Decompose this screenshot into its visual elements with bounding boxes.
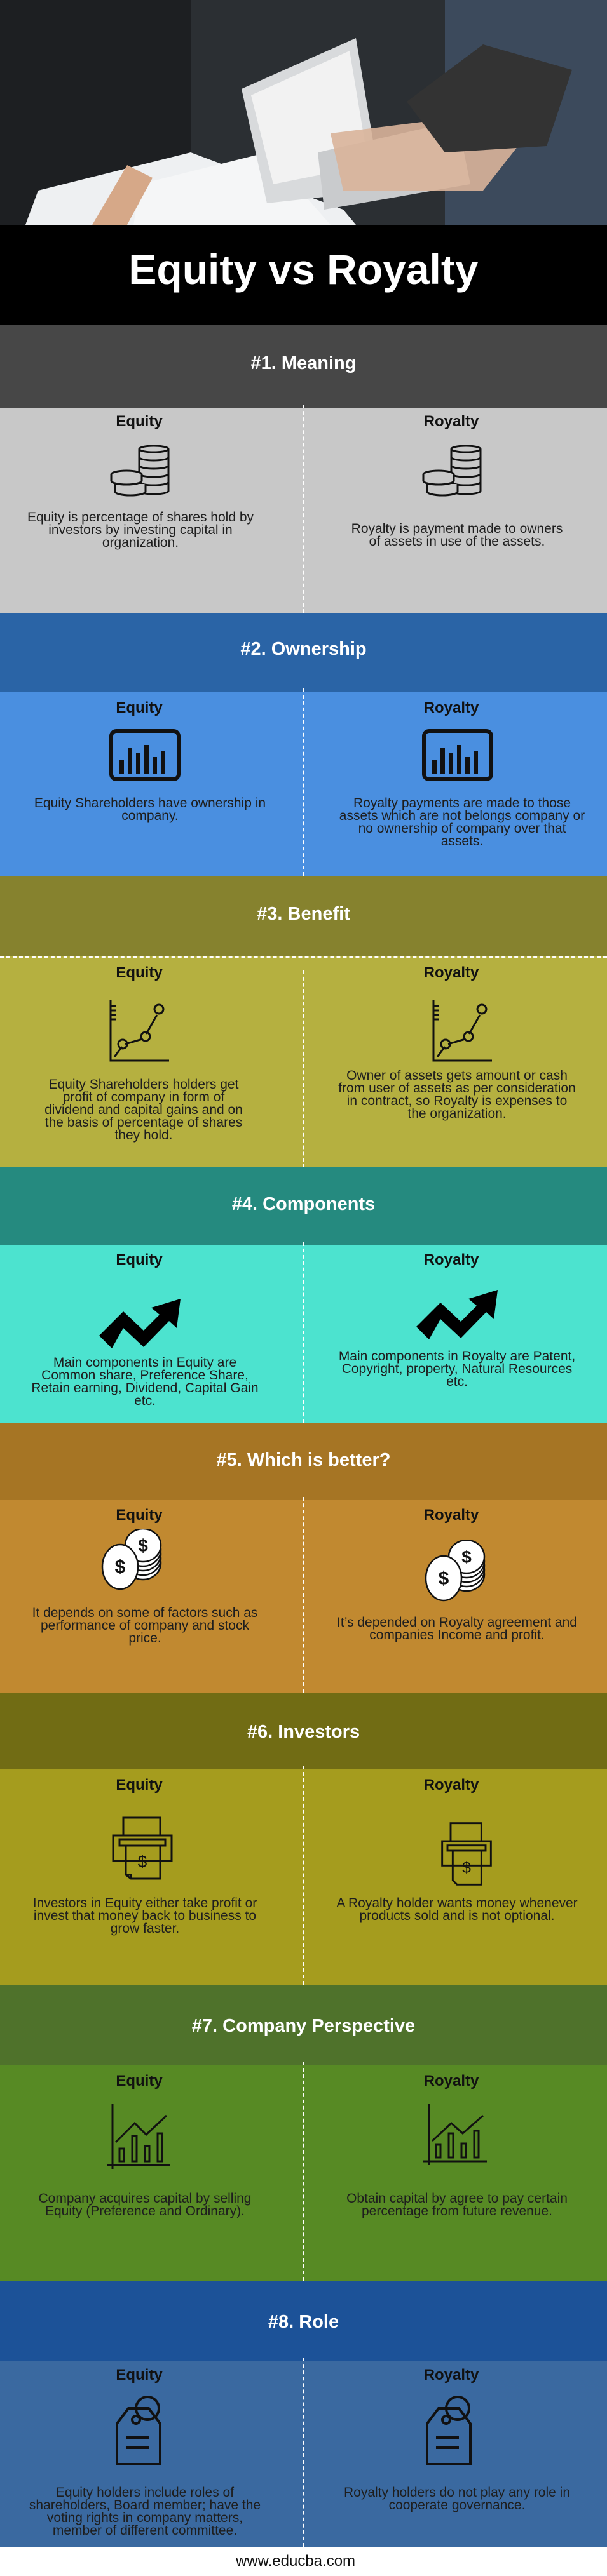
label royalty: Royalty — [424, 2072, 479, 2090]
label royalty: Royalty — [424, 1506, 479, 1524]
icon: printer equity: $ — [138, 1852, 147, 1871]
text royalty — [351, 521, 563, 549]
icon: dollar coins royalty: $ — [461, 1547, 472, 1567]
section 5 body — [0, 1500, 607, 1693]
text equity: Company acquires capital by selling — [38, 2191, 252, 2206]
label equity: Equity — [116, 964, 163, 981]
text royalty: Royalty holders do not play any role in — [344, 2485, 570, 2500]
section 7 header — [0, 1985, 607, 2065]
title — [0, 225, 607, 325]
section 2 body — [0, 692, 607, 876]
text equity: shareholders, Board member; have the — [29, 2498, 261, 2512]
text equity: investors by investing capital in — [48, 523, 233, 537]
photo banner — [0, 0, 607, 225]
icon: bar line chart royalty — [423, 2104, 487, 2165]
text royalty: A Royalty holder wants money whenever — [336, 1896, 578, 1910]
text equity — [33, 1896, 257, 1936]
icon: arrow equity — [99, 1299, 181, 1348]
icon: bar line chart equity — [107, 2104, 170, 2169]
text equity: performance of company and stock — [41, 1618, 249, 1633]
text equity: dividend and capital gains and on — [44, 1103, 243, 1117]
text royalty: Royalty payments are made to those — [353, 796, 571, 810]
text equity — [32, 1606, 257, 1646]
icon: tag equity — [116, 2396, 161, 2465]
text equity: the basis of percentage of shares — [45, 1115, 242, 1130]
label equity: Equity — [116, 413, 163, 430]
label royalty: Royalty — [424, 964, 479, 981]
label equity: Equity — [116, 1506, 163, 1524]
text equity: Equity holders include roles of — [56, 2485, 234, 2500]
text equity — [44, 1077, 243, 1143]
label royalty: Royalty — [424, 2366, 479, 2384]
text royalty — [338, 1068, 576, 1121]
text equity: Common share, Preference Share, — [41, 1368, 249, 1383]
text equity: Equity (Preference and Ordinary). — [45, 2204, 245, 2218]
section 1 header — [0, 325, 607, 408]
label royalty: Royalty — [424, 413, 479, 430]
icon: dollar coins equity: $ — [115, 1557, 126, 1578]
text equity: profit of company in form of — [63, 1090, 224, 1104]
text equity — [34, 796, 266, 823]
icon: tag royalty — [426, 2396, 472, 2465]
text equity: voting rights in company matters, — [47, 2511, 243, 2525]
text equity: Equity Shareholders holders get — [49, 1077, 238, 1092]
text equity: organization. — [102, 535, 179, 550]
icon: line chart equity — [109, 1000, 169, 1062]
text royalty: Owner of assets gets amount or cash — [346, 1068, 568, 1083]
icon: dollar coins equity — [102, 1529, 161, 1590]
section 1 body — [0, 408, 607, 613]
text equity: etc. — [134, 1393, 156, 1408]
label royalty: Royalty — [424, 1251, 479, 1268]
text equity: Equity is percentage of shares hold by — [27, 510, 254, 525]
text equity — [31, 1355, 259, 1408]
text equity: price. — [128, 1631, 161, 1646]
text royalty: assets. — [441, 834, 483, 849]
text equity: they hold. — [114, 1128, 173, 1143]
text royalty: Royalty is payment made to owners — [351, 521, 563, 536]
text royalty: companies Income and profit. — [369, 1628, 545, 1642]
section 7 body — [0, 2065, 607, 2281]
text royalty: Copyright, property, Natural Resources — [342, 1362, 572, 1376]
text royalty: in contract, so Royalty is expenses to — [347, 1094, 567, 1108]
section 1 header: #1. Meaning — [250, 353, 356, 373]
text royalty — [336, 1896, 578, 1923]
section 4 body — [0, 1245, 607, 1423]
text royalty: cooperate governance. — [389, 2498, 525, 2512]
text equity: member of different committee. — [53, 2523, 237, 2538]
text equity: Equity Shareholders have ownership in — [34, 796, 266, 810]
text equity: It depends on some of factors such as — [32, 1606, 257, 1620]
text equity — [38, 2191, 252, 2218]
text royalty: It’s depended on Royalty agreement and — [337, 1615, 577, 1630]
text equity: invest that money back to business to — [34, 1909, 256, 1923]
section 2 header — [0, 613, 607, 692]
icon: printer equity — [112, 1816, 173, 1880]
text royalty: percentage from future revenue. — [362, 2204, 552, 2218]
text equity: Main components in Equity are — [53, 1355, 236, 1370]
icon: coins equity — [111, 445, 169, 497]
icon: dollar coins equity: $ — [138, 1536, 148, 1555]
text royalty — [337, 1615, 577, 1642]
icon: coins royalty — [422, 445, 482, 497]
section 6 header — [0, 1693, 607, 1769]
section 4 header: #4. Components — [232, 1194, 375, 1214]
section 5 header — [0, 1423, 607, 1500]
text royalty — [346, 2191, 568, 2218]
text royalty: assets which are not belongs company or — [339, 808, 585, 823]
section 6 header: #6. Investors — [247, 1722, 360, 1742]
label equity: Equity — [116, 2072, 163, 2090]
footer: www.educba.com — [236, 2553, 355, 2570]
icon: printer royalty — [441, 1822, 492, 1886]
text equity: Retain earning, Dividend, Capital Gain — [31, 1381, 259, 1395]
icon: tablet chart royalty — [422, 729, 493, 781]
section 3 header: #3. Benefit — [257, 904, 350, 924]
text royalty: etc. — [446, 1374, 468, 1389]
label royalty: Royalty — [424, 1776, 479, 1794]
icon: tablet chart equity — [109, 729, 181, 781]
section 8 header — [0, 2281, 607, 2361]
icon: dollar coins royalty — [425, 1540, 486, 1602]
text royalty: no ownership of company over that — [358, 821, 566, 836]
text royalty: Obtain capital by agree to pay certain — [346, 2191, 568, 2206]
text royalty: the organization. — [407, 1106, 507, 1121]
label royalty: Royalty — [424, 699, 479, 716]
text royalty — [339, 1349, 575, 1389]
label equity: Equity — [116, 1251, 163, 1268]
section 4 header — [0, 1167, 607, 1245]
text equity: grow faster. — [111, 1921, 179, 1936]
label equity: Equity — [116, 699, 163, 716]
section 6 body — [0, 1769, 607, 1985]
section 8 body — [0, 2361, 607, 2547]
section 3 header — [0, 876, 607, 956]
label equity: Equity — [116, 1776, 163, 1794]
section 7 header: #7. Company Perspective — [192, 2016, 415, 2036]
text royalty — [344, 2485, 570, 2512]
text equity: company. — [121, 808, 179, 823]
text royalty: of assets in use of the assets. — [369, 534, 545, 549]
title: Equity vs Royalty — [128, 246, 479, 293]
text equity — [27, 510, 254, 550]
text royalty: Main components in Royalty are Patent, — [339, 1349, 575, 1364]
section 2 header: #2. Ownership — [240, 639, 367, 659]
icon: arrow royalty — [416, 1290, 498, 1339]
section 8 header: #8. Role — [268, 2312, 339, 2332]
label equity: Equity — [116, 2366, 163, 2384]
section 5 header: #5. Which is better? — [217, 1450, 390, 1470]
text royalty: from user of assets as per consideration — [338, 1081, 576, 1096]
text equity — [29, 2485, 261, 2538]
text equity: Investors in Equity either take profit or — [33, 1896, 257, 1910]
section 3 body — [0, 956, 607, 1167]
text royalty — [339, 796, 585, 849]
icon: dollar coins royalty: $ — [439, 1568, 449, 1589]
icon: line chart royalty — [432, 1000, 492, 1062]
text royalty: products sold and is not optional. — [359, 1909, 555, 1923]
icon: printer royalty: $ — [462, 1859, 471, 1877]
